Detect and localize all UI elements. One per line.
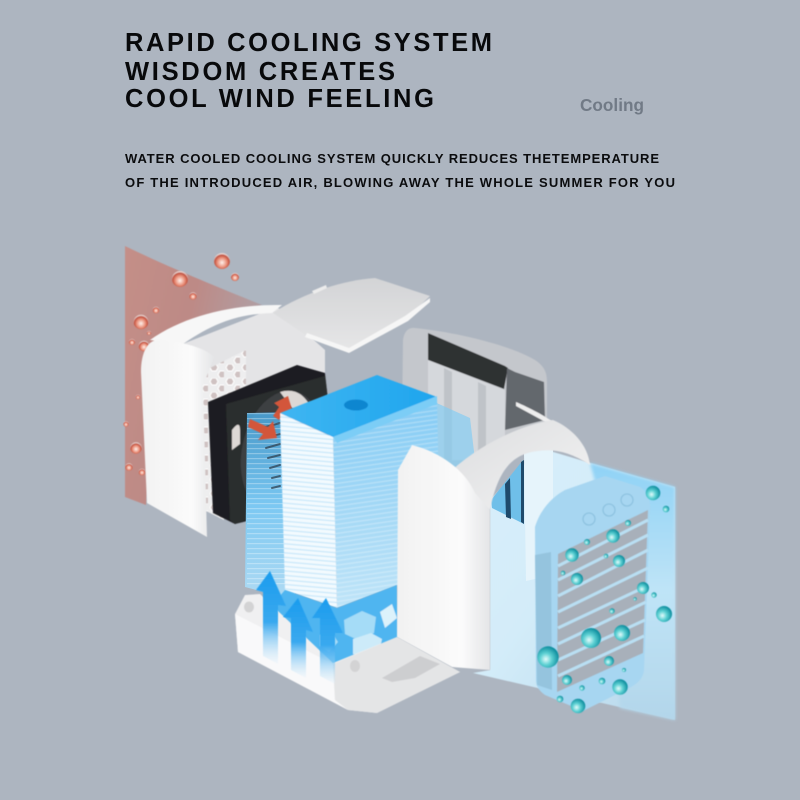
hot air stream	[125, 246, 262, 505]
hot water droplets	[123, 253, 239, 475]
screw post left	[244, 602, 254, 612]
base tray	[235, 594, 460, 713]
subtitle: WATER COOLED COOLING SYSTEM QUICKLY REDUCES THETEMPERATURE	[125, 151, 659, 166]
red air arrows at fan	[248, 396, 293, 440]
title: RAPID COOLING SYSTEM	[125, 29, 492, 57]
arrow 1	[256, 571, 286, 664]
block top face	[280, 375, 437, 437]
water inlet	[344, 400, 368, 410]
cold air stream	[473, 448, 675, 720]
rear housing	[141, 305, 325, 537]
arrow 2	[283, 598, 313, 678]
fan spokes through mesh	[262, 423, 280, 488]
subtitle: OF THE INTRODUCED AIR, BLOWING AWAY THE WHOLE SUMMER FOR YOU	[125, 175, 675, 190]
grille slats	[558, 520, 648, 676]
housing arch	[452, 420, 590, 510]
upward airflow arrows	[256, 571, 343, 684]
blue air mesh behind block	[245, 412, 295, 600]
top lid	[273, 278, 430, 353]
housing front panel	[397, 445, 490, 670]
title: WISDOM CREATES	[125, 58, 395, 86]
inner tank column	[524, 445, 553, 581]
panel grille	[557, 510, 648, 692]
housing front panel	[141, 340, 214, 537]
cooling block	[280, 375, 440, 608]
water tank	[402, 328, 553, 470]
arrow 3	[312, 598, 343, 684]
right rear mesh	[430, 400, 475, 480]
front housing	[397, 420, 590, 670]
label: cooling: Cooling	[580, 95, 644, 115]
panel buttons	[583, 494, 633, 525]
block right face stripes	[333, 396, 440, 608]
tank window under arch	[491, 460, 524, 524]
block left face	[280, 413, 337, 608]
honeycomb grille	[202, 350, 246, 520]
mesh stripes	[247, 413, 287, 588]
cooling fan	[208, 365, 334, 524]
title: COOL WIND FEELING	[125, 85, 434, 113]
cold air stream right band	[590, 463, 675, 720]
screw post right	[350, 660, 360, 672]
panel body	[535, 476, 650, 711]
housing top rim	[150, 305, 282, 344]
housing interior	[180, 307, 325, 470]
cooling control panel	[535, 476, 650, 711]
cold water droplets	[537, 486, 672, 713]
ice tray	[255, 585, 398, 664]
block right face	[333, 396, 440, 608]
